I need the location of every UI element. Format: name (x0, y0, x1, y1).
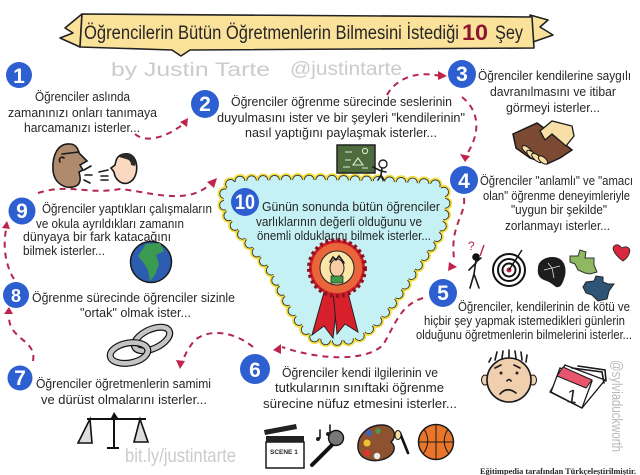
title banner (60, 14, 553, 56)
link text: bit.ly/justintarte (125, 446, 236, 467)
panel: item 2: 2 (199, 93, 211, 116)
panel: item 10 cloud: önemli olduklarını bilmek isterler... (257, 228, 431, 243)
panel: item 9: 9 (16, 200, 28, 223)
author credit: by Justin Tarte (111, 60, 270, 81)
panel: item 3: görmeyi isterler... (506, 100, 600, 115)
icon: brain (538, 257, 566, 287)
panel: item 9: ve okula ayrıldıkları zamanın (36, 216, 184, 231)
panel: item 3: davranılmasını ve itibar (490, 84, 617, 99)
panel: item 7: ve dürüst olmalarını isterler... (41, 392, 207, 407)
arrow: 4 to 5 (448, 198, 464, 271)
panel: item 1: Öğrenciler aslında (35, 89, 131, 104)
icon: sad face (482, 350, 536, 402)
author credit: @justintarte (290, 59, 402, 80)
icon: confused stick figure: ? (468, 239, 475, 253)
panel: item 7 (8, 366, 236, 467)
panel: item 4: "uygun bir şekilde" (511, 202, 607, 217)
panel: item 1: zamanınızı onları tanımaya (8, 105, 158, 120)
icon: paint palette and brush (358, 425, 408, 461)
icon: balance scales (78, 412, 148, 448)
panel: item 9: Öğrenciler yaptıkları çalışmaların (42, 201, 212, 216)
panel: item 2: nasıl yaptığını paylaşmak isterler... (245, 125, 437, 140)
icon: chalkboard with stick figure (337, 145, 387, 180)
panel: item 8: "ortak" olmak ister... (80, 305, 191, 320)
panel: item 5 (416, 279, 632, 452)
panel: item 6: sürecine nüfuz etmesini isterler... (263, 396, 457, 411)
panel: item 10 cloud: varlıklarının değerli olduğunu ve (256, 214, 422, 229)
panel: item 8 (3, 282, 235, 366)
panel: item 7: 7 (14, 367, 26, 390)
panel: item 1 (6, 62, 158, 187)
panel: item 6: Öğrenciler kendi ilgilerinin ve (282, 365, 438, 380)
icon: handshake (513, 121, 574, 166)
arrow: 6 to 7 (176, 333, 253, 369)
icon: chain links (109, 322, 173, 366)
title banner: Öğrencilerin Bütün Öğretmenlerin Bilmesini İstediği (84, 23, 459, 44)
panel: item 9: dünyaya bir fark katacağını (23, 229, 171, 244)
icon: two people talking (53, 144, 137, 187)
icon: basketball (418, 424, 454, 460)
panel: item 6 (240, 354, 457, 468)
icon: confused stick figure (468, 239, 484, 288)
panel: item 7: Öğrenciler öğretmenlerin samimi (36, 376, 211, 391)
icon: earth globe (130, 242, 172, 282)
title banner: Şey (495, 23, 523, 44)
arrow: 5 to 6 (273, 298, 423, 357)
arrow: 8 to 9 (2, 221, 14, 279)
icons: item 4 row (468, 239, 630, 301)
panel: item 10 cloud (224, 180, 445, 341)
arrow: 7 to 8 (4, 307, 33, 361)
panel: item 4 (450, 166, 633, 233)
panel: item 10 cloud: 10 (235, 191, 255, 214)
author credit (111, 59, 402, 81)
panel: item 5: 5 (437, 282, 449, 305)
panel: item 4: 4 (458, 170, 470, 193)
panel: item 2: Öğrenciler öğrenme sürecinde seslerinin (231, 94, 452, 109)
panel: item 1: harcamanızı isterler... (24, 120, 140, 135)
panel: item 3 (448, 60, 631, 166)
arrow: 9 to 10 (38, 178, 217, 196)
panel: item 8: 8 (11, 286, 21, 306)
panel: item 2: duyulmasını ister ve bir şeyleri "kendilerinin" (217, 110, 465, 125)
icon: music notes and microphone (312, 425, 344, 465)
icon: rosette award (309, 240, 365, 338)
panel: item 6: 6 (249, 359, 261, 382)
panel: item 2 (191, 90, 465, 180)
icon: film clapperboard: SCENE 1 (270, 449, 298, 456)
arrow: 3 to 4 (460, 97, 476, 162)
icon: target (493, 250, 525, 286)
icon: heart (613, 245, 630, 261)
panel: item 3: 3 (456, 63, 468, 86)
panel: item 9: bilmek isterler... (23, 243, 105, 258)
panel: item 1: 1 (13, 65, 25, 88)
icon: blue puzzle piece (583, 276, 614, 301)
panel: item 6: tutkularının sınıftaki öğrenme (275, 380, 444, 395)
panel: item 9 (8, 198, 212, 282)
icon: film clapperboard (264, 424, 304, 468)
title banner: 10 (462, 20, 488, 45)
arrow: 1 to 2 (135, 118, 188, 139)
panel: item 4: zorlanmayı isterler... (505, 218, 610, 233)
icon: green puzzle piece (570, 250, 597, 274)
arrow: 2 to 3 (387, 71, 447, 95)
panel: item 8: Öğrenme sürecinde öğrenciler sizinle (32, 290, 235, 305)
icon: monday calendar (550, 365, 606, 408)
panel: item 10 cloud: Günün sonunda bütün öğrenciler (262, 199, 441, 214)
icon: monday calendar: 1 (565, 386, 579, 408)
